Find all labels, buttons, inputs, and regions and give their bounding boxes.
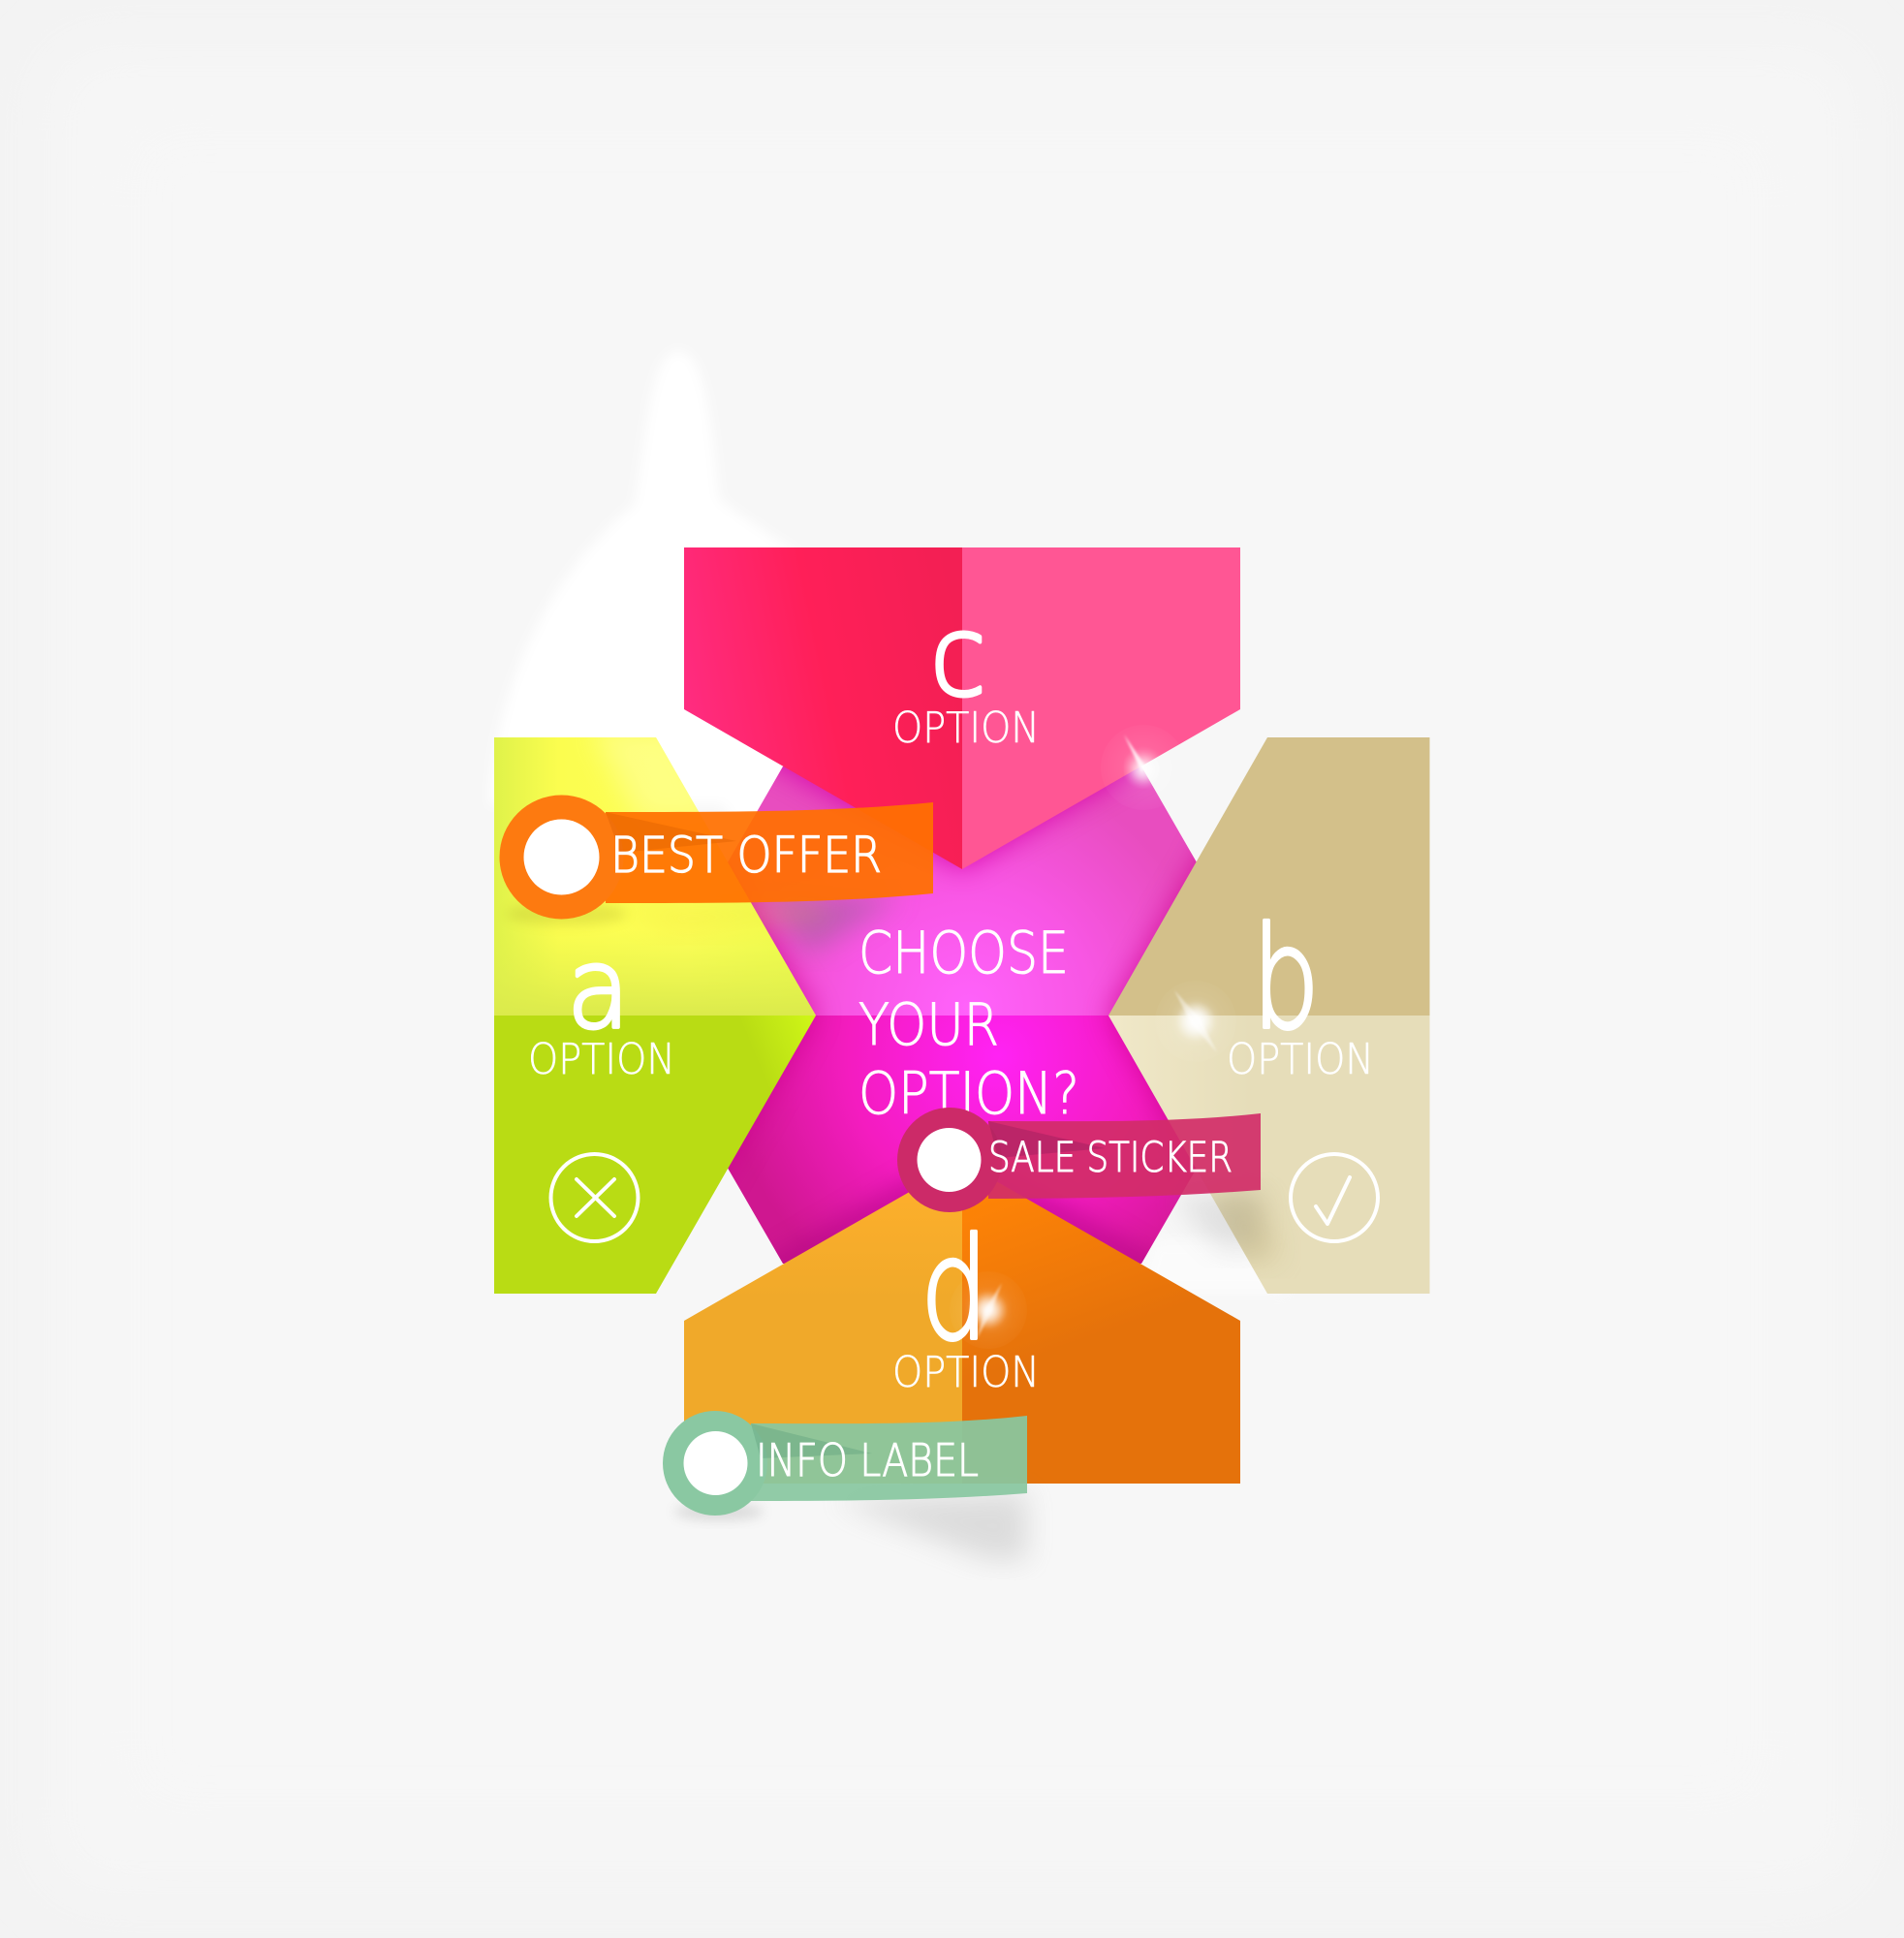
white gap lower right: [1139, 1240, 1289, 1294]
letter d: d: [921, 1208, 988, 1372]
letter c: c: [930, 592, 986, 722]
panel: option c: [684, 547, 1240, 869]
sticker: best offer: [500, 795, 933, 935]
panel: option b: [1108, 737, 1430, 1294]
sticker: info label: INFO LABEL: [756, 1434, 979, 1486]
option label a: OPTION: [528, 1035, 675, 1084]
option label c: OPTION: [892, 703, 1040, 753]
sticker: sale sticker: SALE STICKER: [988, 1134, 1233, 1182]
panel: option d: [684, 1162, 1240, 1484]
heading: choose your option: OPTION?: [858, 1060, 1079, 1128]
icon: cross in circle: [550, 1154, 638, 1241]
icon: lens flare bottom: [950, 1271, 1027, 1349]
letter b: b: [1252, 897, 1320, 1061]
letter a: a: [567, 924, 630, 1054]
panel: central hexagon: [728, 766, 1197, 1264]
heading: choose your option: YOUR: [858, 991, 999, 1059]
heading: choose your option: [858, 920, 1079, 1128]
sticker: best offer: BEST OFFER: [610, 828, 882, 885]
icon: lens flare top: [1101, 725, 1186, 810]
sticker: info label: [663, 1411, 1027, 1560]
option label d: OPTION: [892, 1348, 1040, 1397]
icon: check in circle: [1291, 1154, 1378, 1241]
white glow behind the figure: [489, 351, 804, 824]
panel: option a: [494, 727, 816, 1294]
option label b: OPTION: [1227, 1035, 1374, 1084]
sticker: sale sticker: [897, 1108, 1261, 1250]
heading: choose your option: CHOOSE: [858, 920, 1069, 987]
icon: lens flare right: [1155, 981, 1236, 1062]
